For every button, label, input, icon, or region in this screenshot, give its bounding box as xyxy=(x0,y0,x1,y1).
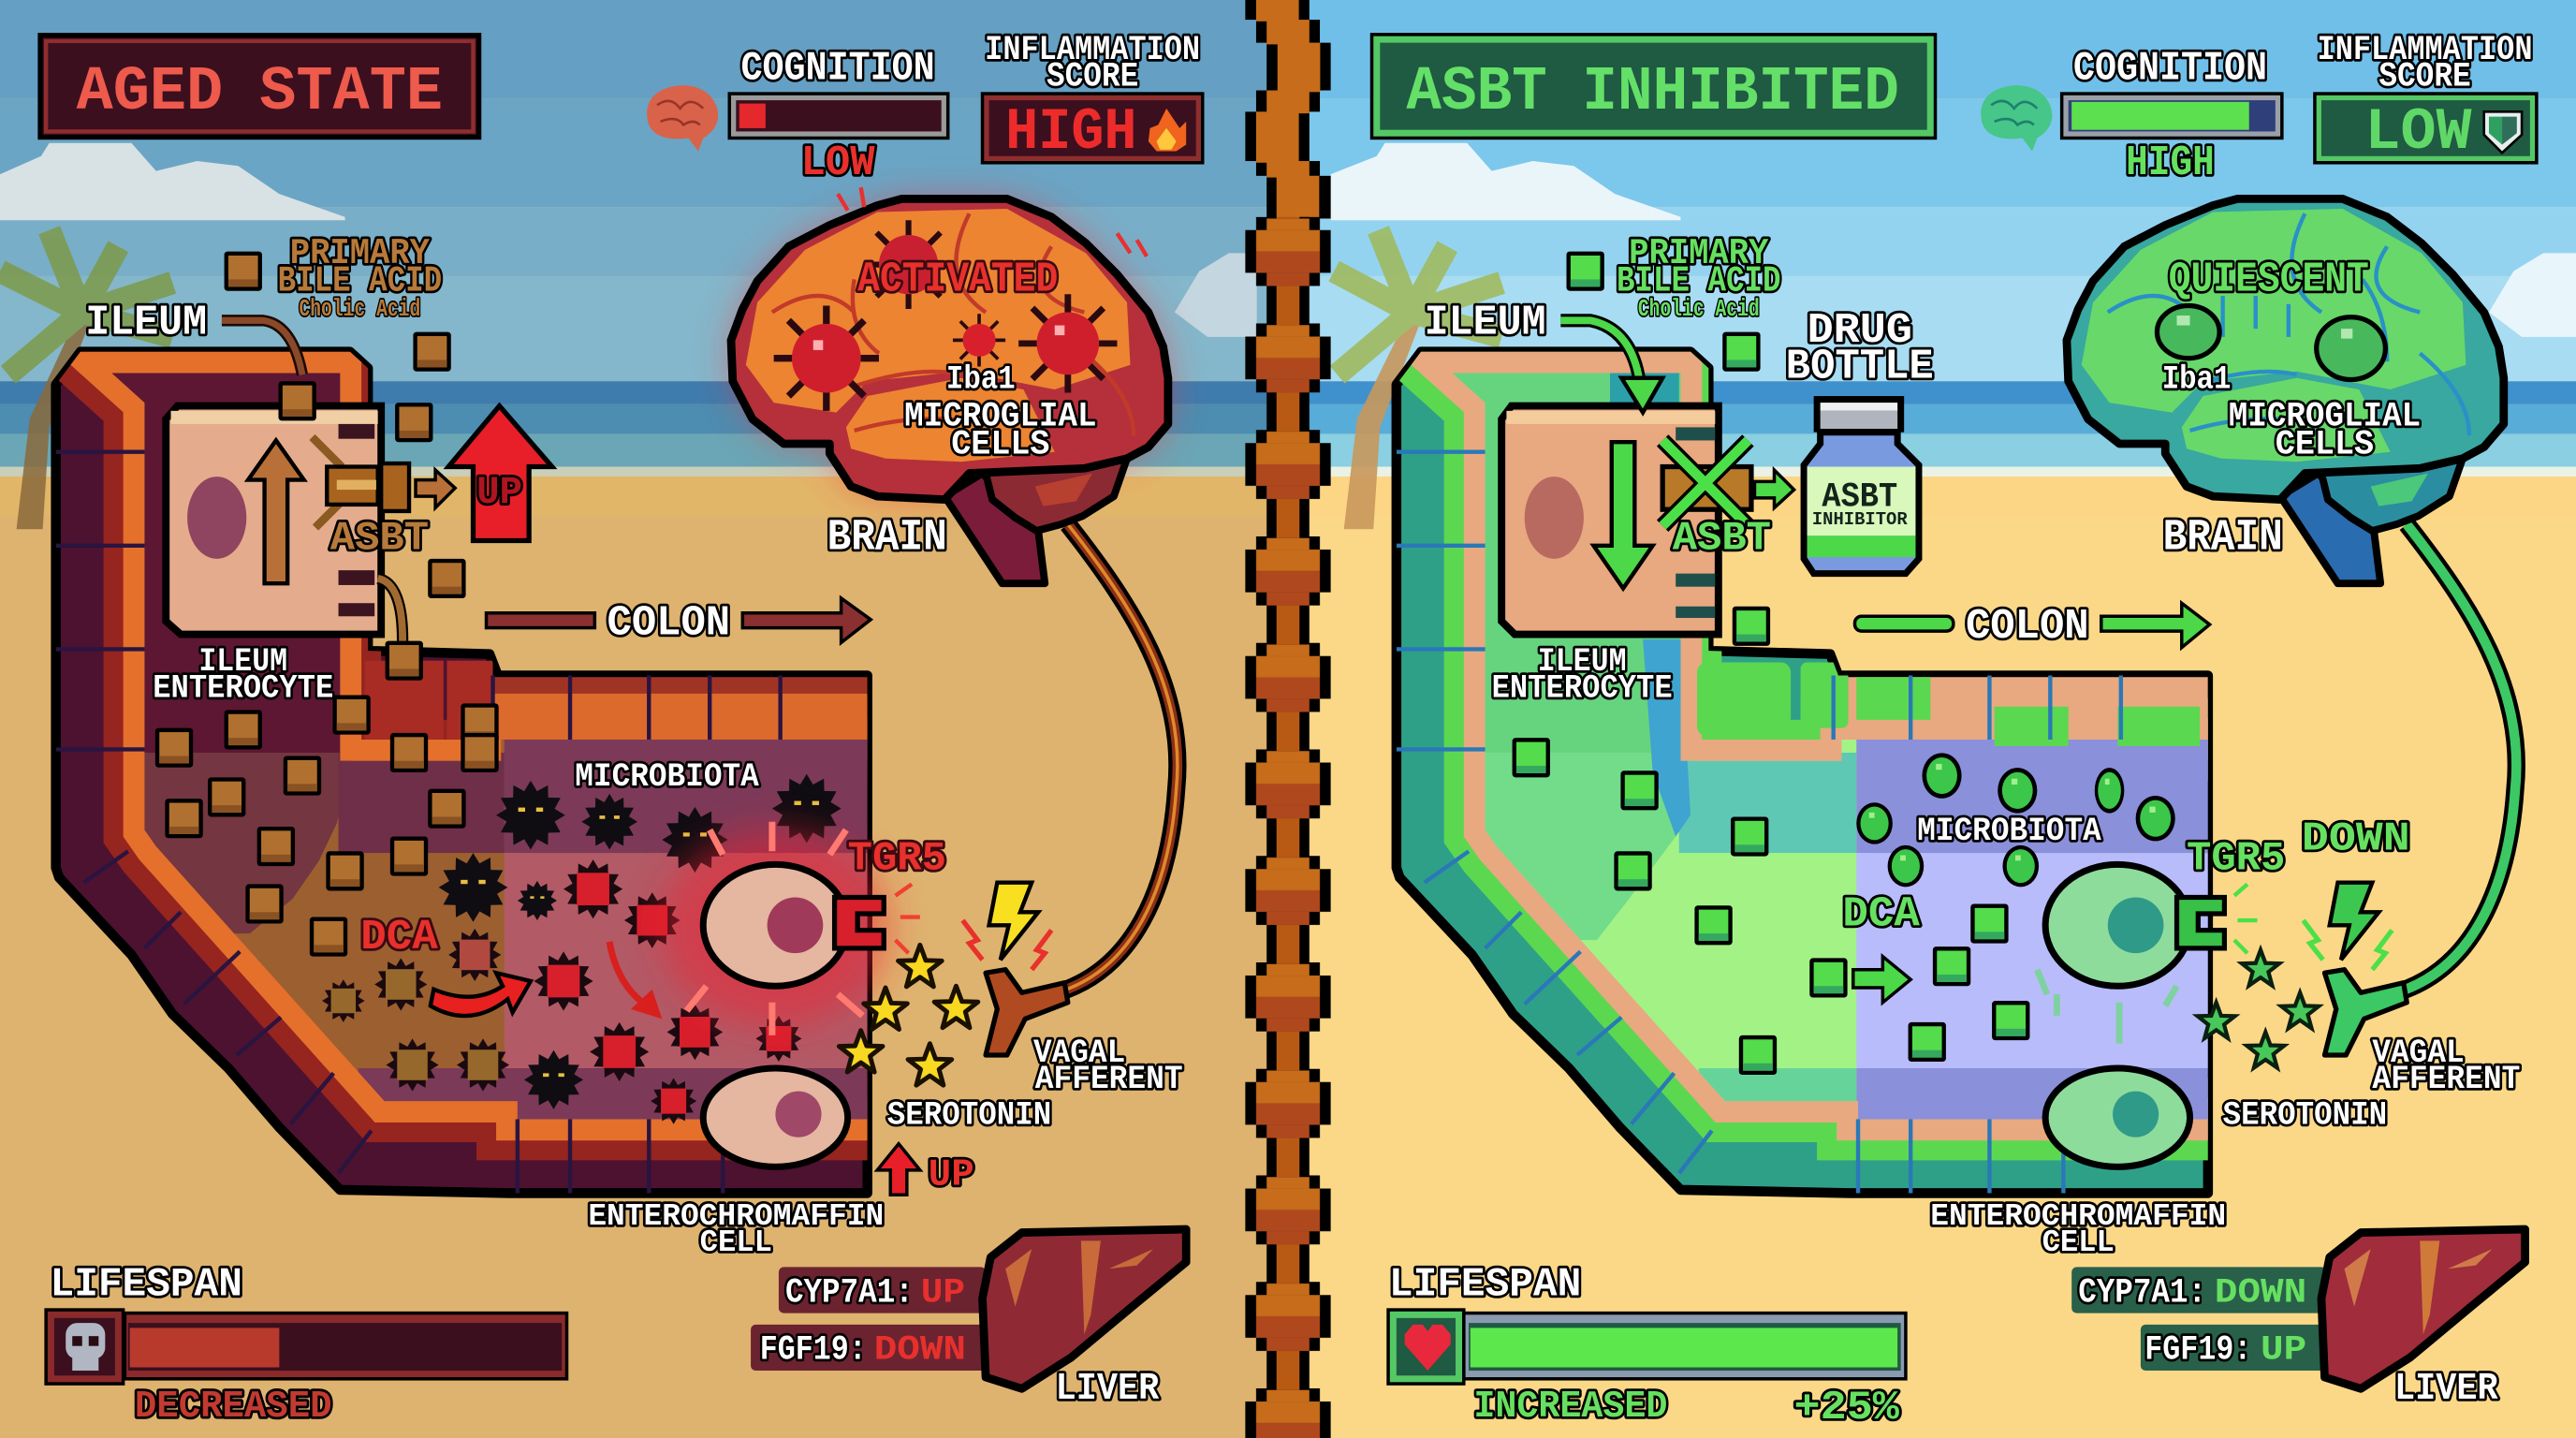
arrow: dca reduced xyxy=(1853,957,1910,1003)
transporter: asbt blocked xyxy=(1662,440,1794,562)
label: quiescent: QUIESCENT xyxy=(2169,256,2369,304)
pill: fgf19 up: FGF19: xyxy=(2144,1331,2251,1371)
pill: cyp7a1 down: DOWN xyxy=(2215,1273,2306,1313)
label: serotonin, inhibited: SEROTONIN xyxy=(2223,1097,2387,1135)
label: primary bile acid: PRIMARY xyxy=(1629,233,1769,274)
label: lifespan: LIFESPAN xyxy=(1389,1261,1581,1308)
value: +25%: +25% xyxy=(1794,1385,1900,1431)
label: enterochromaffin cell, aged xyxy=(588,1199,884,1261)
cell: ileum enterocyte, aged xyxy=(166,406,381,635)
pill: fgf19 up: UP xyxy=(2261,1331,2306,1371)
icon: brain xyxy=(647,85,718,151)
label: microglial cells: CELLS xyxy=(951,425,1050,464)
label: serotonin up xyxy=(877,1097,1051,1197)
label: primary bile acid xyxy=(1617,233,1781,323)
bar xyxy=(1462,1312,1908,1381)
label: microbiota, aged: MICROBIOTA xyxy=(575,758,760,796)
arrow: big up: UP xyxy=(476,470,522,515)
label: iba1: Iba1 xyxy=(946,360,1016,398)
label: brain, aged: BRAIN xyxy=(827,513,947,563)
organ: liver xyxy=(983,1229,1186,1388)
label: ileum enterocyte: ILEUM xyxy=(1538,643,1627,681)
cell: enterochromaffin, aged xyxy=(703,1068,848,1167)
arrow: colon direction, inhibited: COLON xyxy=(1966,602,2089,651)
label: microglial cells xyxy=(2229,398,2421,464)
arrow: transport up xyxy=(248,440,304,583)
pill: cyp7a1 down: CYP7A1: xyxy=(2078,1273,2206,1313)
label: primary bile acid: Cholic Acid xyxy=(1638,295,1760,323)
gauge: lifespan decreased xyxy=(44,1261,568,1429)
label: dca, inhibited: DCA xyxy=(1842,889,1920,938)
microbiota: green microbes xyxy=(1856,753,2175,887)
nerve: vagal afferent, aged xyxy=(986,524,1178,1055)
label: inflammation score xyxy=(2318,31,2532,96)
pill: fgf19 down xyxy=(751,1325,986,1371)
value: high: HIGH xyxy=(2126,139,2215,187)
pill: cyp7a1 up: UP xyxy=(921,1273,965,1313)
arrow: colon direction, aged: COLON xyxy=(607,599,730,648)
brain stem xyxy=(2280,474,2380,583)
title: aged state: AGED STATE xyxy=(77,57,443,128)
title: asbt inhibited: ASBT INHIBITED xyxy=(1406,57,1899,128)
label: microglial cells: MICROGLIAL xyxy=(904,398,1097,437)
label: microbiota, inhibited: MICROBIOTA xyxy=(1917,813,2102,850)
status: inflammation high xyxy=(981,31,1204,166)
label: iba1: Iba1 xyxy=(2162,360,2231,398)
brain: activated xyxy=(731,187,1168,583)
label: enterochromaffin cell, inhibited: ENTEROCHROMAFFIN xyxy=(1930,1199,2226,1235)
label: vagal afferent, inhibited: AFFERENT xyxy=(2372,1061,2520,1098)
label: liver: LIVER xyxy=(1056,1368,1160,1411)
status: cognition high xyxy=(1981,45,2284,187)
icon: heart xyxy=(1386,1308,1466,1386)
nucleus xyxy=(1525,477,1584,559)
label: vagal afferent, aged xyxy=(1033,1034,1183,1098)
drug bottle xyxy=(1786,306,1934,574)
cloud: left xyxy=(1331,143,1680,220)
drug bottle: INHIBITOR xyxy=(1812,509,1908,530)
palm tree xyxy=(1334,230,1501,529)
cell: tgr5 activated, aged xyxy=(661,822,946,1035)
label: tgr5: TGR5 xyxy=(848,836,946,883)
icon: lightning, aged xyxy=(962,883,1051,970)
icon: skull xyxy=(44,1308,124,1386)
label: primary bile acid: Cholic Acid xyxy=(299,295,420,323)
bricks: colon wall top xyxy=(365,661,868,740)
serotonin stars, inhibited xyxy=(2198,950,2319,1068)
label: lifespan: LIFESPAN xyxy=(51,1261,242,1308)
label: asbt: ASBT xyxy=(1673,515,1771,562)
label: vagal afferent, inhibited: VAGAL xyxy=(2372,1034,2465,1072)
label: dca, aged: DCA xyxy=(360,913,438,961)
nerve ending: fork xyxy=(986,970,1068,1055)
cloud: left xyxy=(0,143,345,220)
status: cognition low xyxy=(647,45,949,187)
pill: cyp7a1 up xyxy=(779,1267,986,1313)
bile acid cubes, aged xyxy=(155,252,499,957)
bricks: colon wall top xyxy=(1697,662,2208,746)
icon: lightning, inhibited xyxy=(2304,883,2392,970)
nerve ending: fork xyxy=(2324,970,2407,1055)
organ: ileum and colon, aged xyxy=(56,352,920,1193)
gauge: cognition bar xyxy=(2060,92,2284,139)
label: ileum enterocyte: ENTEROCYTE xyxy=(153,669,333,707)
nerve: vagal afferent, inhibited xyxy=(2324,524,2516,1055)
cerebellum xyxy=(986,459,1127,531)
receptor: tgr5 xyxy=(835,897,884,948)
bile acid cubes, inhibited xyxy=(1513,252,2029,1075)
alert sparks xyxy=(838,187,1147,257)
arrow: toward tgr5 xyxy=(609,942,662,1019)
cloud: right xyxy=(2489,253,2576,337)
icon: brain xyxy=(1981,85,2052,151)
palm tree xyxy=(0,230,172,529)
icon: shield xyxy=(2484,111,2522,153)
cell: enterochromaffin, inhibited xyxy=(2045,1068,2190,1167)
value: increased: INCREASED xyxy=(1473,1386,1667,1429)
cerebellum xyxy=(2321,459,2463,531)
label: cognition: COGNITION xyxy=(2073,45,2267,92)
label: enterochromaffin cell, aged: CELL xyxy=(700,1225,772,1261)
arrow: drug action xyxy=(1754,470,1794,507)
label: serotonin up: UP xyxy=(929,1154,974,1197)
arrow: transport down xyxy=(1593,442,1653,588)
pill: fgf19 down: FGF19: xyxy=(760,1331,867,1371)
cell: tgr5 quiet, inhibited xyxy=(2037,816,2410,1044)
label: ileum enterocyte xyxy=(153,643,333,707)
brain: quiescent xyxy=(2067,198,2504,583)
pill: cyp7a1 up: CYP7A1: xyxy=(785,1273,914,1313)
panel: aged state background xyxy=(0,0,1281,1438)
badge: low xyxy=(2313,92,2539,166)
badge: low: LOW xyxy=(2364,98,2472,166)
icon: flame xyxy=(1149,109,1186,151)
pill: cyp7a1 down xyxy=(2071,1267,2326,1313)
label: activated: ACTIVATED xyxy=(857,256,1058,304)
cloud: right xyxy=(1175,253,1257,337)
microglia: resting cells xyxy=(2157,306,2385,380)
label: inflammation score: SCORE xyxy=(2378,57,2471,96)
label: primary bile acid xyxy=(278,233,442,323)
gauge: cognition bar xyxy=(728,92,949,139)
microbes: dca conversion xyxy=(322,929,509,1092)
liver: inhibited xyxy=(2071,1229,2525,1411)
tube: efflux to colon xyxy=(378,579,402,648)
badge: high: HIGH xyxy=(1005,98,1137,166)
arrow: big up xyxy=(448,406,552,541)
arrow: serotonin up xyxy=(877,1144,920,1195)
arrow: conversion to dca xyxy=(431,973,531,1016)
labels: ileum xyxy=(85,298,302,374)
panel: asbt inhibited background xyxy=(1281,0,2576,1438)
pill: fgf19 down: DOWN xyxy=(874,1331,966,1371)
organ: liver xyxy=(2321,1229,2525,1388)
serotonin stars, aged xyxy=(839,945,978,1085)
liver: aged xyxy=(751,1229,1186,1411)
divider: zigzag column xyxy=(1245,0,1331,1438)
label: enterochromaffin cell, aged: ENTEROCHROMAFFIN xyxy=(588,1199,884,1235)
label: inflammation score: INFLAMMATION xyxy=(985,31,1200,70)
organ: ileum and colon, inhibited xyxy=(1397,352,2261,1193)
label: vagal afferent, aged: AFFERENT xyxy=(1035,1061,1183,1098)
label: inflammation score: SCORE xyxy=(1046,57,1138,96)
label: primary bile acid: BILE ACID xyxy=(1617,261,1781,302)
label: primary bile acid: PRIMARY xyxy=(290,233,431,274)
label: ileum enterocyte: ENTEROCYTE xyxy=(1492,669,1673,707)
labels: ileum: ILEUM xyxy=(85,298,207,346)
label: down: DOWN xyxy=(2302,816,2410,863)
microbiota: black microbes xyxy=(439,774,842,1109)
nucleus xyxy=(187,477,246,559)
label: microglial cells: CELLS xyxy=(2276,425,2374,464)
label: vagal afferent, aged: VAGAL xyxy=(1033,1034,1125,1072)
pill: fgf19 up xyxy=(2141,1325,2326,1371)
label: ileum enterocyte xyxy=(1492,643,1673,707)
title: aged state xyxy=(37,33,481,139)
label: tgr5: TGR5 xyxy=(2187,836,2285,883)
arrow: efflux xyxy=(416,470,455,507)
label: vagal afferent, inhibited xyxy=(2372,1034,2520,1098)
label: microglial cells: MICROGLIAL xyxy=(2229,398,2421,437)
microglia: activated cells xyxy=(774,220,1117,411)
bar xyxy=(124,1312,568,1381)
gauge: lifespan increased xyxy=(1386,1261,1908,1431)
label: enterochromaffin cell, inhibited: CELL xyxy=(2042,1225,2115,1261)
labels: ileum xyxy=(1425,298,1662,413)
value: low: LOW xyxy=(801,139,875,187)
mark: green x xyxy=(1662,440,1748,526)
badge: high xyxy=(981,92,1204,166)
drug bottle: ASBT xyxy=(1822,478,1897,518)
label: cognition: COGNITION xyxy=(741,45,935,92)
label: enterochromaffin cell, inhibited xyxy=(1930,1199,2226,1261)
label: brain, inhibited: BRAIN xyxy=(2163,513,2283,563)
status: inflammation low xyxy=(2313,31,2539,166)
label: drug bottle: DRUG xyxy=(1808,306,1912,355)
arrow: colon direction, inhibited xyxy=(1855,602,2210,651)
labels: ileum: ILEUM xyxy=(1425,298,1546,346)
label: inflammation score xyxy=(985,31,1200,96)
label: drug bottle: BOTTLE xyxy=(1786,343,1934,391)
label: serotonin up: SEROTONIN xyxy=(887,1097,1051,1135)
value: decreased: DECREASED xyxy=(135,1386,332,1429)
arrow: colon direction, aged xyxy=(487,598,871,648)
label: ileum enterocyte: ILEUM xyxy=(198,643,287,681)
brain stem xyxy=(944,474,1045,583)
microbiota: red microbes xyxy=(534,859,801,1124)
cell: ileum enterocyte, inhibited xyxy=(1501,406,1719,635)
label: drug bottle xyxy=(1786,306,1934,391)
label: inflammation score: INFLAMMATION xyxy=(2318,31,2532,70)
label: asbt: ASBT xyxy=(330,515,429,562)
label: primary bile acid: BILE ACID xyxy=(278,261,442,302)
title: asbt inhibited xyxy=(1370,33,1937,139)
label: liver: LIVER xyxy=(2394,1368,2498,1411)
receptor: tgr5 xyxy=(2177,897,2224,948)
transporter: asbt, aged xyxy=(312,437,455,562)
label: microglial cells xyxy=(904,398,1097,464)
